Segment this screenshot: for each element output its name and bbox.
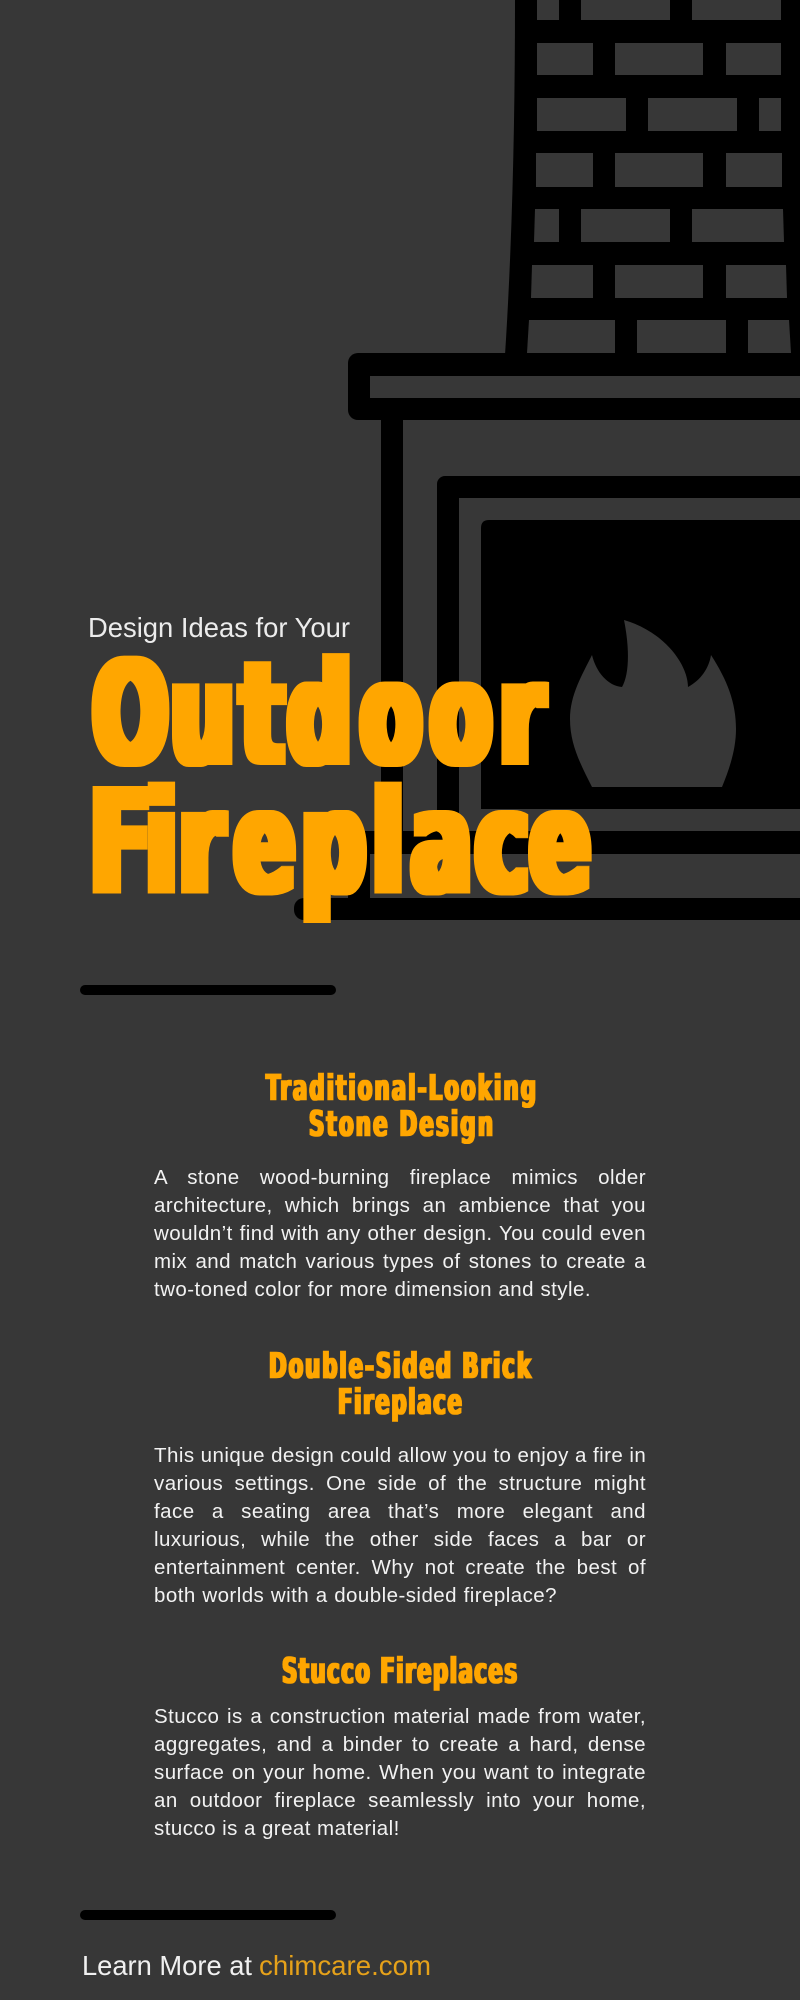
divider bar top — [80, 985, 336, 995]
footer: learn more: chimcare.com — [259, 1950, 431, 1981]
text block: double-sided brick: entertainment center. Why not create the best of — [154, 1556, 646, 1579]
hearth base — [294, 831, 800, 920]
text block: stucco: Stucco is a construction material made from water, — [154, 1705, 646, 1728]
text block: double-sided brick: both worlds with a double-sided fireplace? — [154, 1584, 557, 1607]
icon: flame — [570, 620, 736, 787]
text block: stucco: an outdoor fireplace seamlessly into your home, — [154, 1789, 646, 1812]
firebox surround and opening — [437, 476, 800, 854]
heading: stucco: Stucco Fireplaces — [282, 1650, 517, 1691]
heading: traditional stone: Stone Design — [309, 1103, 493, 1144]
text block: stone design: two-toned color for more dimension and style. — [154, 1278, 591, 1301]
title: Outdoor Fireplace: Fireplace — [91, 759, 590, 925]
text block: double-sided brick: various settings. One side of the structure might — [154, 1472, 646, 1495]
text block: double-sided brick: luxurious, while the other side faces a bar or — [154, 1528, 646, 1551]
chimney — [505, 0, 800, 355]
text block: stucco — [154, 1705, 646, 1840]
text block: stone design — [154, 1166, 646, 1301]
divider bar bottom — [80, 1910, 336, 1920]
text block: stone design: architecture, which brings an ambience that you — [154, 1194, 646, 1217]
mantel shelf — [348, 353, 800, 420]
footer: learn more: Learn More at — [82, 1950, 252, 1981]
heading: traditional stone: Traditional-Looking — [266, 1067, 536, 1108]
text block: double-sided brick: face a seating area that’s more elegant and — [154, 1500, 646, 1523]
text block: double-sided brick — [154, 1444, 646, 1607]
fireplace column — [381, 418, 403, 832]
text block: stone design: wouldn’t find with any other design. You could even — [154, 1222, 646, 1245]
heading: traditional stone — [266, 1067, 536, 1144]
subtitle: Design Ideas for Your — [88, 612, 350, 643]
text block: stone design: A stone wood-burning fireplace mimics older — [154, 1166, 646, 1189]
heading: double-sided brick: Fireplace — [338, 1381, 462, 1422]
title: Outdoor Fireplace — [91, 631, 590, 925]
text block: stucco: surface on your home. When you want to integrate — [154, 1761, 646, 1784]
text block: double-sided brick: This unique design could allow you to enjoy a fire in — [154, 1444, 646, 1467]
title: Outdoor Fireplace: Outdoor — [93, 631, 543, 797]
text block: stone design: mix and match various types of stones to create a — [154, 1250, 646, 1273]
text block: stucco: aggregates, and a binder to create a hard, dense — [154, 1733, 646, 1756]
heading: double-sided brick — [269, 1345, 532, 1422]
heading: double-sided brick: Double-Sided Brick — [269, 1345, 532, 1386]
footer: learn more — [82, 1950, 431, 1981]
text block: stucco: stucco is a great material! — [154, 1817, 400, 1840]
